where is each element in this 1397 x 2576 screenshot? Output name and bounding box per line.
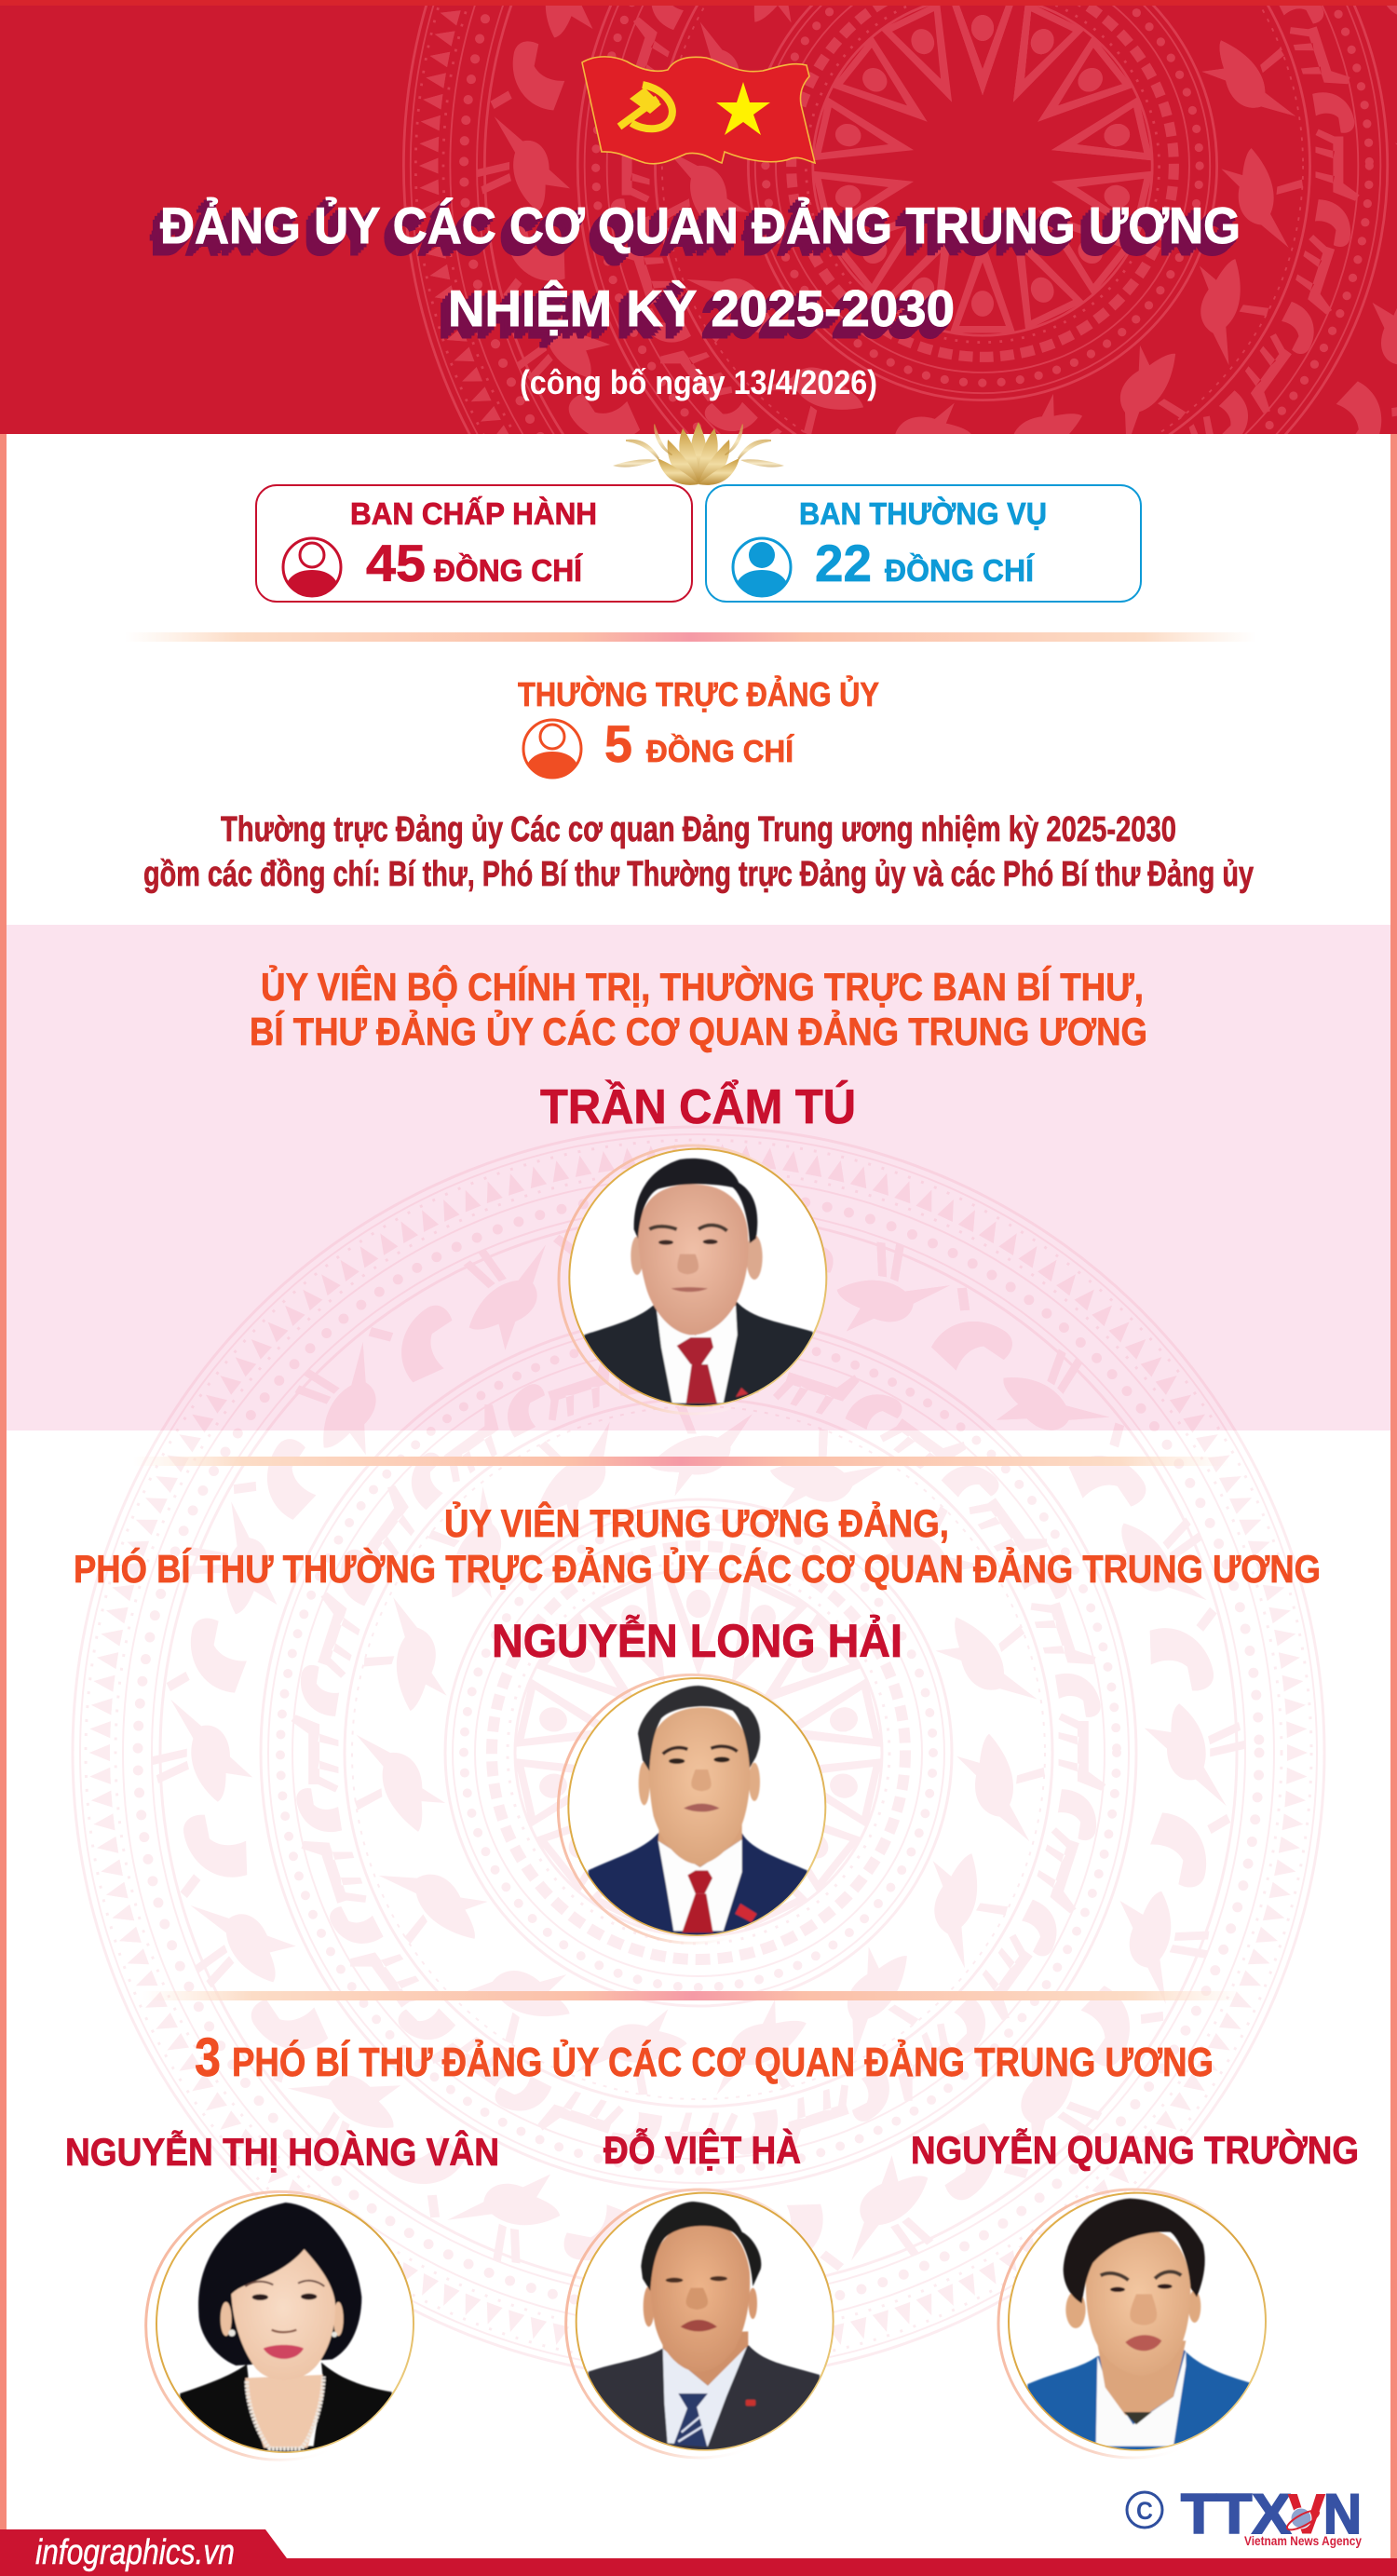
date subtitle: (công bố ngày 13/4/2026)	[520, 363, 877, 401]
icon: party flag	[582, 57, 815, 164]
number 45: 45	[366, 534, 426, 592]
unit: ĐỒNG CHÍ	[885, 553, 1035, 588]
decorative bronze drum in header	[402, 6, 1397, 434]
title: ĐẢNG ỦY CÁC CƠ QUAN ĐẢNG TRUNG ƯƠNG	[160, 197, 1241, 254]
portrait: Nguyễn Long Hải	[558, 1674, 826, 1946]
heading: THƯỜNG TRỰC ĐẢNG ỦY	[518, 674, 879, 713]
portrait: Trần Cẩm Tú	[559, 1146, 827, 1416]
unit: ĐỒNG CHÍ	[646, 734, 794, 768]
TTXVN logo: TTX	[1181, 2483, 1291, 2545]
heading: BAN THƯỜNG VỤ	[799, 496, 1047, 531]
divider	[142, 1991, 1243, 2000]
TTXVN logo: Vietnam News Agency	[1244, 2533, 1362, 2548]
decorative bronze drum background	[65, 1119, 1332, 2386]
panel: Ban Chấp hành	[256, 485, 692, 602]
panel: Thường trực Đảng ủy	[143, 674, 1254, 894]
name: Trần Cẩm Tú: TRẦN CẨM TÚ	[540, 1079, 856, 1134]
heading: three deputy secretaries: 3	[195, 2027, 221, 2088]
website label: infographics.vn	[35, 2533, 235, 2572]
icon: golden lotus	[613, 422, 784, 485]
copyright logo	[1127, 2492, 1162, 2528]
number 5: 5	[604, 714, 632, 773]
unit: ĐỒNG CHÍ	[434, 553, 583, 588]
number 22: 22	[815, 534, 872, 592]
name: Đỗ Việt Hà: ĐỖ VIỆT HÀ	[604, 2127, 801, 2172]
title	[160, 197, 1241, 337]
divider	[133, 1457, 1229, 1466]
divider	[125, 632, 1256, 642]
TTXVN logo: V	[1288, 2483, 1325, 2545]
footer band	[0, 2558, 1397, 2576]
heading: position of Trần Cẩm Tú	[250, 964, 1147, 1053]
heading: BAN CHẤP HÀNH	[350, 496, 597, 531]
heading: three deputy secretaries	[195, 2027, 1214, 2088]
heading: three deputy secretaries: PHÓ BÍ THƯ ĐẢNG ỦY CÁC CƠ QUAN ĐẢNG TRUNG ƯƠNG	[232, 2038, 1214, 2085]
portrait: Đỗ Việt Hà	[566, 2190, 834, 2459]
side border left	[0, 434, 7, 2558]
side border right	[1390, 434, 1397, 2558]
header top strip	[0, 0, 1397, 6]
icon: person orange	[523, 720, 581, 778]
heading: position of Trần Cẩm Tú: BÍ THƯ ĐẢNG ỦY CÁC CƠ QUAN ĐẢNG TRUNG ƯƠNG	[250, 1009, 1147, 1053]
icon: person red	[283, 538, 341, 596]
heading: position of Trần Cẩm Tú: ỦY VIÊN BỘ CHÍNH TRỊ, THƯỜNG TRỰC BAN BÍ THƯ,	[261, 964, 1144, 1009]
panel: Ban Thường vụ	[706, 485, 1141, 602]
icon: person blue	[733, 538, 791, 596]
heading: position of Nguyễn Long Hải: ỦY VIÊN TRUNG ƯƠNG ĐẢNG,	[444, 1500, 949, 1545]
description	[143, 810, 1254, 894]
name: Nguyễn Thị Hoàng Vân: NGUYỄN THỊ HOÀNG VÂN	[65, 2129, 499, 2174]
title: NHIỆM KỲ 2025-2030	[448, 279, 955, 337]
heading: position of Nguyễn Long Hải	[74, 1500, 1321, 1591]
panel: header red background	[0, 0, 1397, 434]
TTXVN logo: N	[1323, 2483, 1362, 2545]
portrait: Nguyễn Quang Trường	[998, 2190, 1267, 2459]
TTXVN logo	[1181, 2483, 1362, 2548]
copyright logo: C	[1136, 2497, 1153, 2525]
panel: pink highlight band	[0, 925, 1397, 1430]
name: Nguyễn Long Hải: NGUYỄN LONG HẢI	[492, 1615, 902, 1667]
portrait: Nguyễn Thị Hoàng Vân	[146, 2191, 414, 2460]
footer tag	[0, 2529, 287, 2576]
